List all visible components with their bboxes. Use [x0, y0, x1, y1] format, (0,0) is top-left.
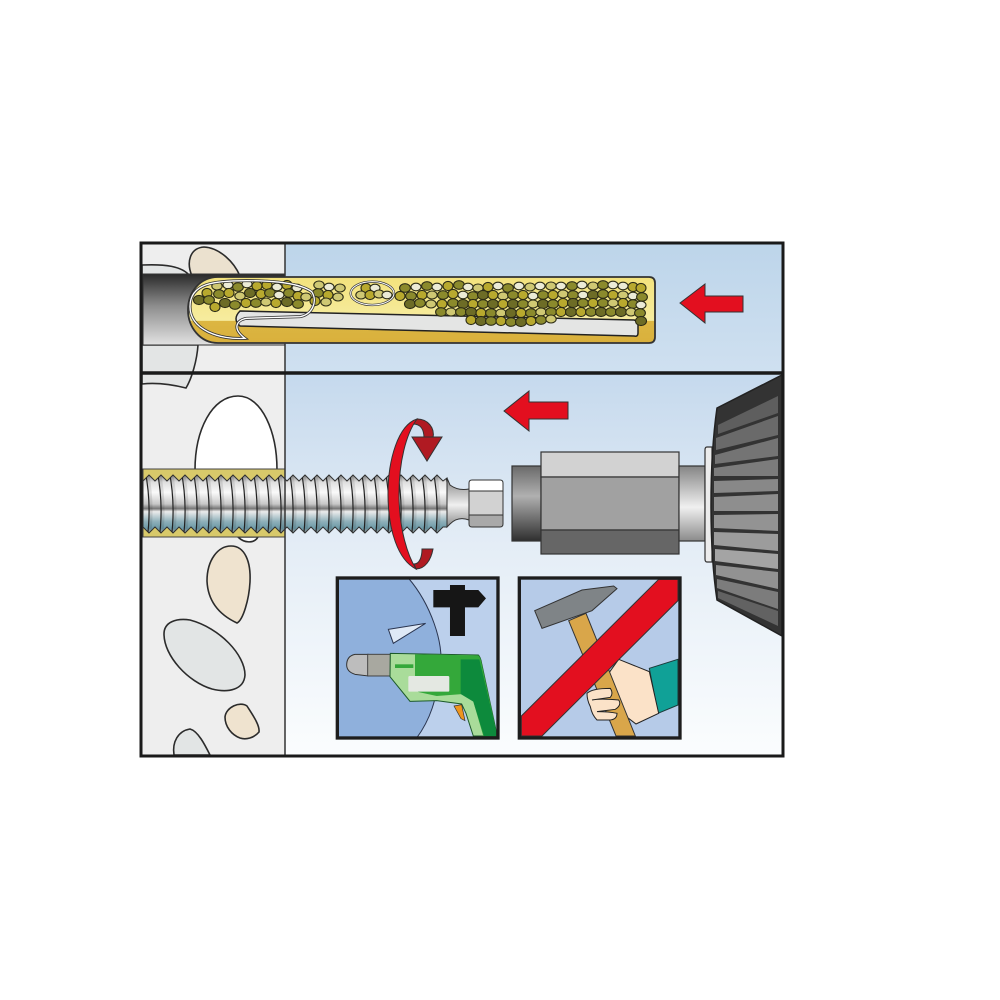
stone: grey crossing divider	[142, 345, 198, 388]
chuck flange	[705, 447, 712, 562]
rotation arrow	[388, 419, 442, 569]
socket cylinder	[512, 466, 541, 541]
red prohibition band	[521, 579, 678, 736]
stones	[194, 280, 647, 327]
stone: grey top left	[142, 265, 190, 276]
icon frame	[519, 578, 680, 738]
wall section top	[142, 244, 285, 373]
arrow: bottom push	[504, 391, 568, 431]
inner rod	[236, 311, 638, 336]
lower dark arrow tail	[414, 549, 433, 569]
icon: no hammer	[519, 578, 680, 738]
hex bottom face	[541, 530, 679, 554]
drill chuck	[711, 375, 782, 636]
rod neck	[447, 478, 469, 527]
black T symbol	[433, 585, 486, 636]
upper dark arrow tail	[413, 419, 433, 438]
stone: beige tall	[207, 546, 250, 623]
red ring band	[388, 419, 417, 569]
outer frame	[141, 243, 783, 756]
stone: white centre	[195, 396, 277, 470]
thread lines	[143, 475, 447, 533]
blue circle	[337, 578, 441, 738]
panel: top step background	[141, 243, 783, 373]
upper arrow head	[412, 437, 442, 461]
forearm sleeve	[649, 659, 678, 713]
chuck fins	[714, 396, 778, 626]
drill socket	[512, 447, 712, 562]
stone: grey bottom	[174, 729, 210, 755]
glass capsule body	[188, 277, 655, 343]
drill hole	[143, 274, 285, 345]
hammer head	[535, 586, 617, 628]
stone: beige top	[189, 247, 240, 276]
resin layer around threaded rod	[143, 469, 285, 537]
panel: bottom step background	[141, 373, 783, 756]
stone: grey oval	[164, 620, 245, 691]
icon frame	[337, 578, 498, 738]
threaded rod	[143, 475, 503, 533]
white triangle	[388, 623, 426, 643]
stone: white fragment under rod	[238, 537, 258, 542]
wall stones	[142, 247, 277, 755]
chuck neck	[679, 466, 705, 541]
palm	[609, 659, 659, 724]
wall section bottom	[142, 374, 285, 756]
stone: beige small	[225, 704, 259, 739]
icon background	[519, 578, 680, 738]
broken glass outlines	[190, 281, 394, 339]
rod hex end	[469, 480, 503, 527]
fingers	[587, 688, 620, 720]
icon: rotary drill only	[337, 578, 498, 738]
capsule	[188, 277, 655, 343]
wall edge line and panel divider	[141, 244, 783, 756]
icon background	[337, 578, 498, 738]
hex top face	[541, 452, 679, 477]
hammer handle	[569, 613, 635, 736]
drill	[347, 653, 496, 736]
arrow: top push	[680, 284, 743, 323]
hex middle face	[541, 477, 679, 530]
